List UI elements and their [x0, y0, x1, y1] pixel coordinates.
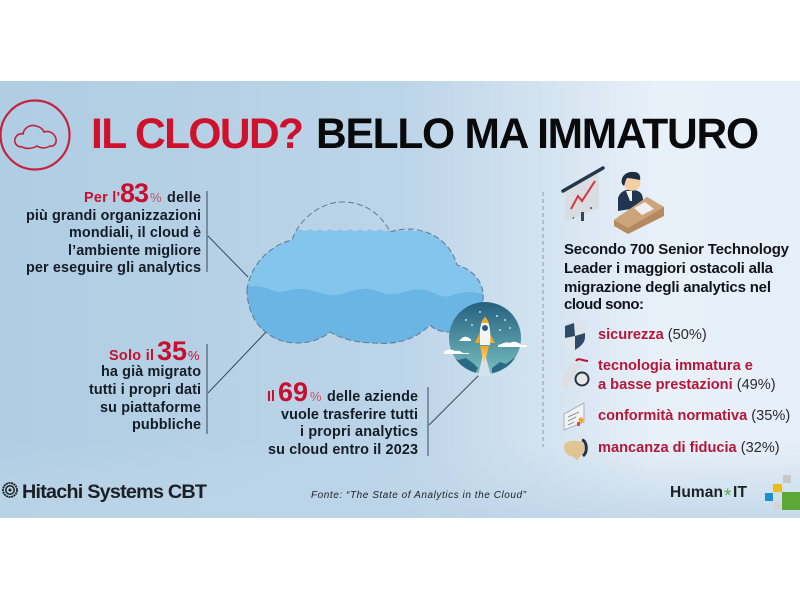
- text: obstacles intro: cloud sono:: [564, 296, 644, 313]
- obstacle: tecnologia immatura: a basse prestazioni (49%): [598, 377, 776, 393]
- callout: 83%: Per l': [84, 190, 120, 206]
- callout: 83%: delle: [167, 190, 201, 206]
- obstacle: conformita normativa: conformità normativa (35%): [598, 408, 790, 424]
- obstacle: tecnologia immatura: tecnologia immatura e: [598, 358, 753, 374]
- callout: 35%: pubbliche: [132, 417, 201, 433]
- title: IL CLOUD?: [91, 111, 304, 158]
- text: obstacles intro: Leader i maggiori ostacoli alla: [564, 260, 774, 277]
- callout: 35%: su piattaforme: [100, 400, 201, 416]
- icon: cloud in circle: [0, 100, 70, 170]
- callout: 83%: l’ambiente migliore: [68, 243, 201, 259]
- obstacle: mancanza di fiducia: [564, 440, 780, 460]
- callout: 83%: 83: [120, 178, 149, 208]
- callout: 35%: [89, 331, 267, 434]
- callout: 35%: ha già migrato: [101, 364, 201, 380]
- obstacle: tecnologia immatura: [562, 358, 776, 393]
- callout: 35%: 35: [157, 336, 187, 366]
- callout: 69%: 69: [278, 377, 308, 407]
- callout: 69%: vuole trasferire tutti: [281, 407, 418, 423]
- icon: rocket badge: [444, 302, 527, 378]
- obstacle: sicurezza: [565, 320, 707, 351]
- text: obstacles intro: migrazione degli analytics nel: [564, 279, 771, 296]
- callout: 83%: %: [150, 190, 162, 205]
- callout: 69%: i propri analytics: [300, 424, 418, 440]
- obstacle: sicurezza: sicurezza (50%): [598, 327, 707, 343]
- logo: Human IT: [670, 475, 800, 510]
- callout: 69%: su cloud entro il 2023: [268, 442, 418, 458]
- callout: 35%: Solo il: [109, 348, 154, 364]
- title: BELLO MA IMMATURO: [316, 111, 759, 158]
- callout: 69%: Il: [267, 389, 275, 405]
- callout: 83%: per eseguire gli analytics: [26, 260, 201, 276]
- callout: 83%: più grandi organizzazioni: [26, 208, 201, 224]
- cloud illustration: [240, 202, 490, 350]
- text: obstacles intro: [564, 241, 790, 313]
- source note: Fonte: “The State of Analytics in the Cloud”: [311, 490, 527, 501]
- callout: 83%: mondiali, il cloud è: [69, 225, 201, 241]
- background panel: [0, 81, 800, 518]
- obstacle: mancanza di fiducia: mancanza di fiducia (32%): [598, 440, 780, 456]
- callout: 35%: tutti i propri dati: [89, 382, 201, 398]
- callout: 83%: [26, 178, 248, 277]
- text: obstacles intro: Secondo 700 Senior Technology: [564, 241, 790, 258]
- logo: Human IT: *: [724, 486, 732, 507]
- callout: 69%: [267, 369, 485, 458]
- dashed divider: [542, 192, 544, 447]
- logo: Human IT: Human: [670, 484, 723, 501]
- logo: Hitachi Systems CBT: Hitachi Systems CBT: [22, 481, 207, 503]
- obstacle: conformita normativa: [564, 403, 790, 430]
- callout: 69%: %: [310, 389, 322, 404]
- callout: 69%: delle aziende: [327, 389, 418, 405]
- icon: chart board and manager: [563, 168, 664, 234]
- callout: 35%: %: [188, 348, 200, 363]
- logo: Human IT: IT: [733, 484, 748, 501]
